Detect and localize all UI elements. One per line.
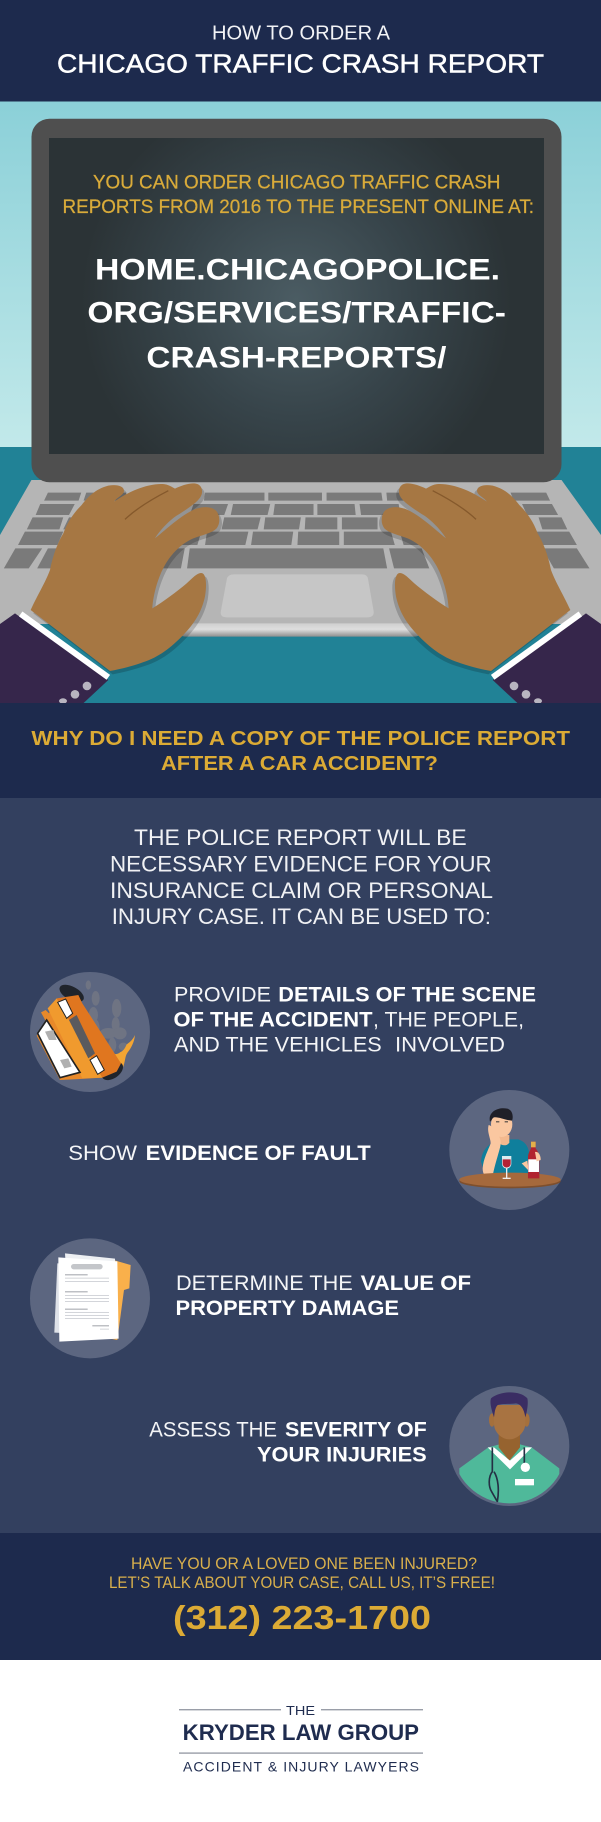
icon: man drinking at table	[449, 1090, 569, 1210]
intro paragraph	[110, 825, 493, 929]
trackpad	[221, 574, 374, 617]
icon: overturned burning car	[30, 972, 150, 1092]
title: CHICAGO TRAFFIC CRASH REPORT	[57, 51, 544, 79]
car hood	[48, 998, 102, 1078]
intro paragraph: INSURANCE CLAIM OR PERSONAL	[110, 878, 493, 903]
bottle	[528, 1142, 539, 1178]
screen text: url: ORG/SERVICES/TRAFFIC-	[87, 297, 506, 330]
header band	[0, 0, 601, 102]
icon: doctor	[449, 1386, 569, 1510]
reason 4 text: ASSESS THE	[149, 1419, 277, 1442]
reason 1 text: INVOLVED	[395, 1034, 505, 1057]
band: call to action	[0, 1533, 601, 1660]
reason 1 text: AND THE VEHICLES	[174, 1034, 382, 1057]
reason 1 text: OF THE ACCIDENT	[174, 1009, 373, 1032]
icon: documents and folder	[30, 1238, 150, 1358]
logo: Kryder Law Group: THE	[286, 1703, 315, 1718]
band: why heading	[0, 703, 601, 798]
call to action text: HAVE YOU OR A LOVED ONE BEEN INJURED?	[131, 1555, 477, 1573]
footer background	[0, 1660, 601, 1822]
screen text: intro	[62, 173, 534, 218]
reason 4 text: SEVERITY OF	[285, 1419, 427, 1442]
car front	[57, 995, 121, 1078]
header kicker: HOW TO ORDER A	[212, 21, 390, 44]
laptop base and keyboard	[0, 480, 601, 637]
panel: laptop scene	[0, 102, 601, 704]
reason 1 text	[174, 984, 536, 1057]
reason 3 text	[176, 1272, 471, 1320]
panel: reasons background	[0, 798, 601, 1533]
reason 2 text: SHOW	[68, 1142, 137, 1165]
reason 2 text: EVIDENCE OF FAULT	[146, 1142, 371, 1165]
screen text: url: HOME.CHICAGOPOLICE.	[95, 253, 500, 286]
laptop lid	[32, 119, 562, 482]
intro paragraph: THE POLICE REPORT WILL BE	[134, 825, 467, 850]
intro paragraph: INJURY CASE. IT CAN BE USED TO:	[112, 904, 491, 929]
logo: Kryder Law Group: ACCIDENT & INJURY LAWYERS	[183, 1759, 419, 1775]
left hand and cuff	[0, 483, 222, 704]
screen text: url	[87, 253, 506, 374]
phone number: (312) 223-1700	[173, 1599, 431, 1636]
reason 1 text: DETAILS OF THE SCENE	[278, 984, 536, 1007]
reason 1 text: PROVIDE	[174, 984, 271, 1007]
reason 3 text: PROPERTY DAMAGE	[176, 1297, 399, 1320]
intro paragraph: NECESSARY EVIDENCE FOR YOUR	[110, 852, 492, 877]
heading: AFTER A CAR ACCIDENT?	[161, 752, 438, 775]
logo: Kryder Law Group: KRYDER LAW GROUP	[183, 1720, 419, 1745]
logo: Kryder Law Group	[179, 1703, 423, 1775]
reason 4 text: YOUR INJURIES	[257, 1444, 427, 1467]
right hand and cuff	[379, 483, 601, 704]
reason 1 text: , THE PEOPLE,	[373, 1009, 524, 1032]
reason 4 text	[149, 1419, 427, 1467]
heading	[31, 727, 571, 775]
reason 3 text: VALUE OF	[361, 1272, 471, 1295]
table	[459, 1174, 561, 1188]
wine glass	[502, 1156, 511, 1168]
car roof side	[37, 998, 102, 1080]
laptop screen	[49, 138, 544, 454]
reason 3 text: DETERMINE THE	[176, 1272, 353, 1295]
screen text: intro: YOU CAN ORDER CHICAGO TRAFFIC CRASH	[93, 173, 500, 194]
call to action text: LET’S TALK ABOUT YOUR CASE, CALL US, IT’S FREE!	[109, 1574, 495, 1592]
screen text: intro: REPORTS FROM 2016 TO THE PRESENT ONLINE AT:	[62, 197, 534, 218]
call to action text	[109, 1555, 495, 1592]
screen text: url: CRASH-REPORTS/	[146, 341, 447, 374]
shirt	[481, 1139, 529, 1174]
heading: WHY DO I NEED A COPY OF THE POLICE REPORT	[31, 727, 571, 750]
